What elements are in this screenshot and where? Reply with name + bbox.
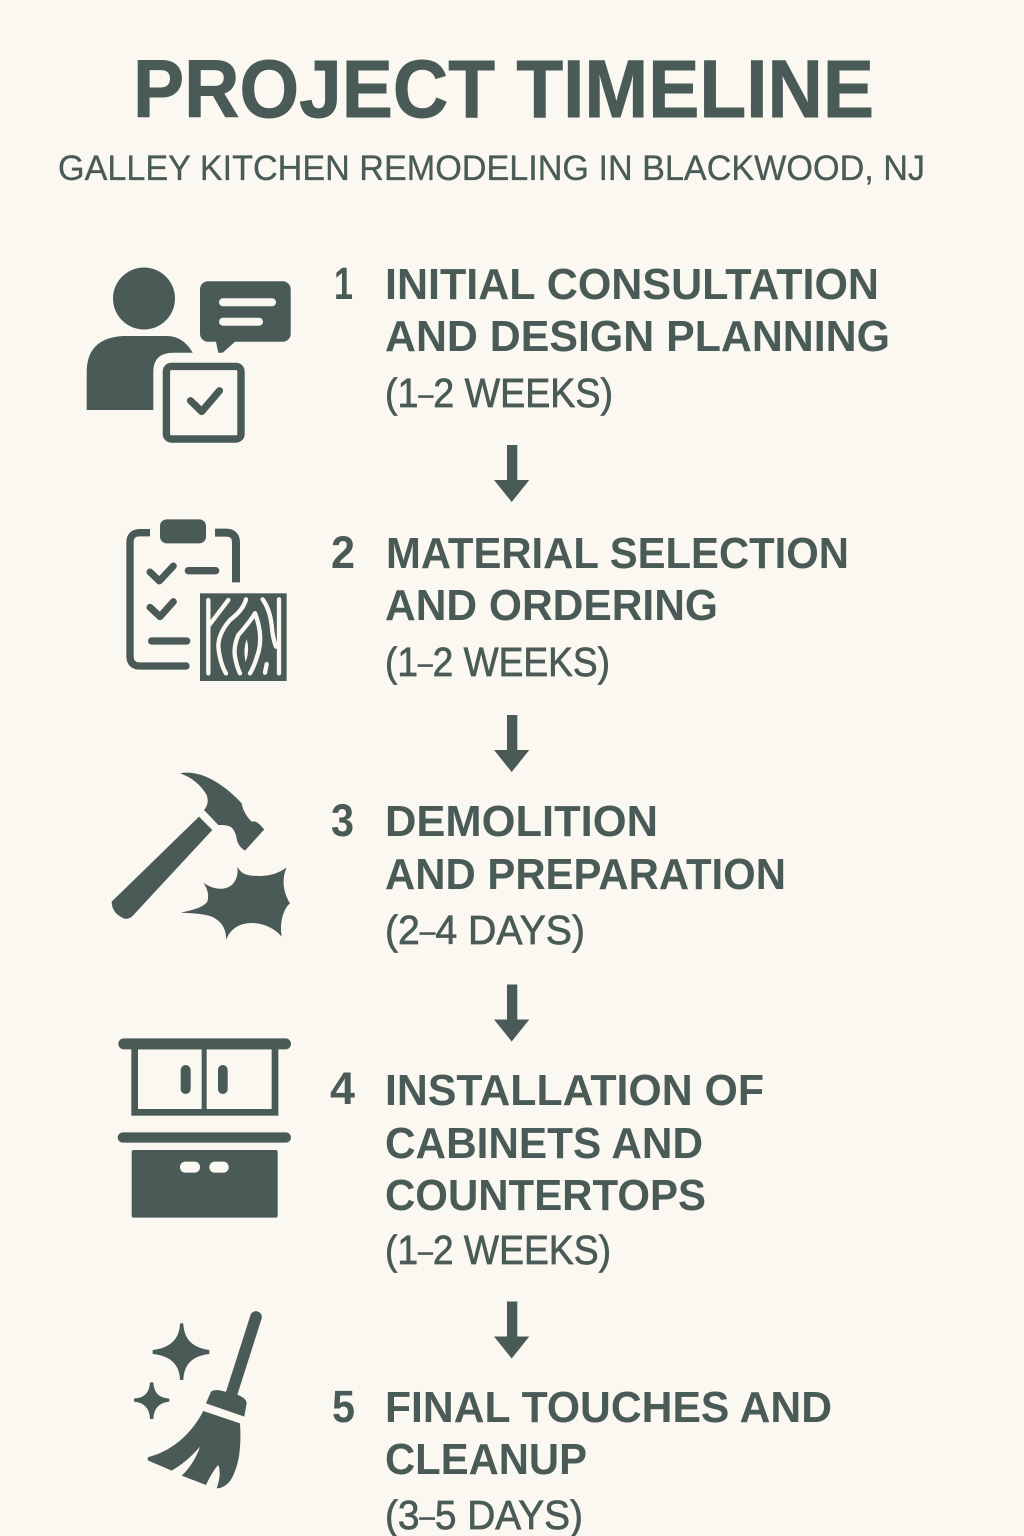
step 2 heading [385,529,849,630]
arrow 3 to 4 [494,984,529,1042]
step 5 heading: CLEANUP [385,1435,587,1484]
step 3 duration: – [420,916,436,948]
step 4 duration: (1 [385,1227,421,1273]
arrow 2 to 3 [494,715,529,772]
step number 3: 3 [331,795,354,846]
step 5 heading: FINAL TOUCHES AND [385,1383,832,1432]
arrow 1 to 2 [494,445,529,502]
subtitle: GALLEY KITCHEN REMODELING IN BLACKWOOD, NJ [58,149,925,188]
step 3 heading: AND PREPARATION [385,850,786,899]
step 1 heading [385,260,890,361]
step 1 heading: INITIAL CONSULTATION [385,260,879,309]
step 5 heading [385,1383,832,1484]
icon: broom and sparkles [134,1317,256,1488]
step 1 heading: AND DESIGN PLANNING [385,312,890,361]
step 3 duration: (2 [385,907,421,953]
step number 5: 5 [332,1381,355,1432]
icon: person with speech bubble and checkbox [87,268,291,439]
step 3 duration: 4 DAYS) [435,907,585,953]
step 5 duration: – [420,1501,436,1533]
step 1 duration: (1 [385,370,421,416]
step 5 [134,1317,832,1536]
step number 1: 1 [334,258,353,309]
step 3 heading: DEMOLITION [385,797,658,846]
step 4 heading: CABINETS AND [385,1119,703,1168]
step number 4: 4 [330,1063,355,1114]
step 2 heading: MATERIAL SELECTION [386,529,849,578]
step 4 heading: COUNTERTOPS [385,1171,706,1220]
icon: kitchen cabinets and countertop [118,1038,291,1218]
step 1 duration: – [418,379,434,411]
step 2 duration: – [418,648,433,680]
step 2 [130,519,849,685]
title: PROJECT TIMELINE [133,44,874,135]
step 2 heading: AND ORDERING [385,581,718,630]
step 4 [118,1038,764,1273]
icon: clipboard and wood sample [130,519,287,681]
icon: hammer and impact burst [112,773,290,940]
step number 2: 2 [331,527,355,578]
arrow 4 to 5 [494,1302,529,1358]
step 4 duration: 2 WEEKS) [433,1227,611,1273]
step 1 [87,258,890,439]
step 2 duration: (1 [385,639,421,685]
step 3 heading [385,797,786,899]
step 4 duration: – [418,1236,434,1268]
step 4 heading: INSTALLATION OF [385,1066,764,1115]
step 4 heading [385,1066,764,1220]
step 2 duration: 2 WEEKS) [433,639,610,685]
step 3 [112,773,786,953]
step 1 duration: 2 WEEKS) [433,370,613,416]
